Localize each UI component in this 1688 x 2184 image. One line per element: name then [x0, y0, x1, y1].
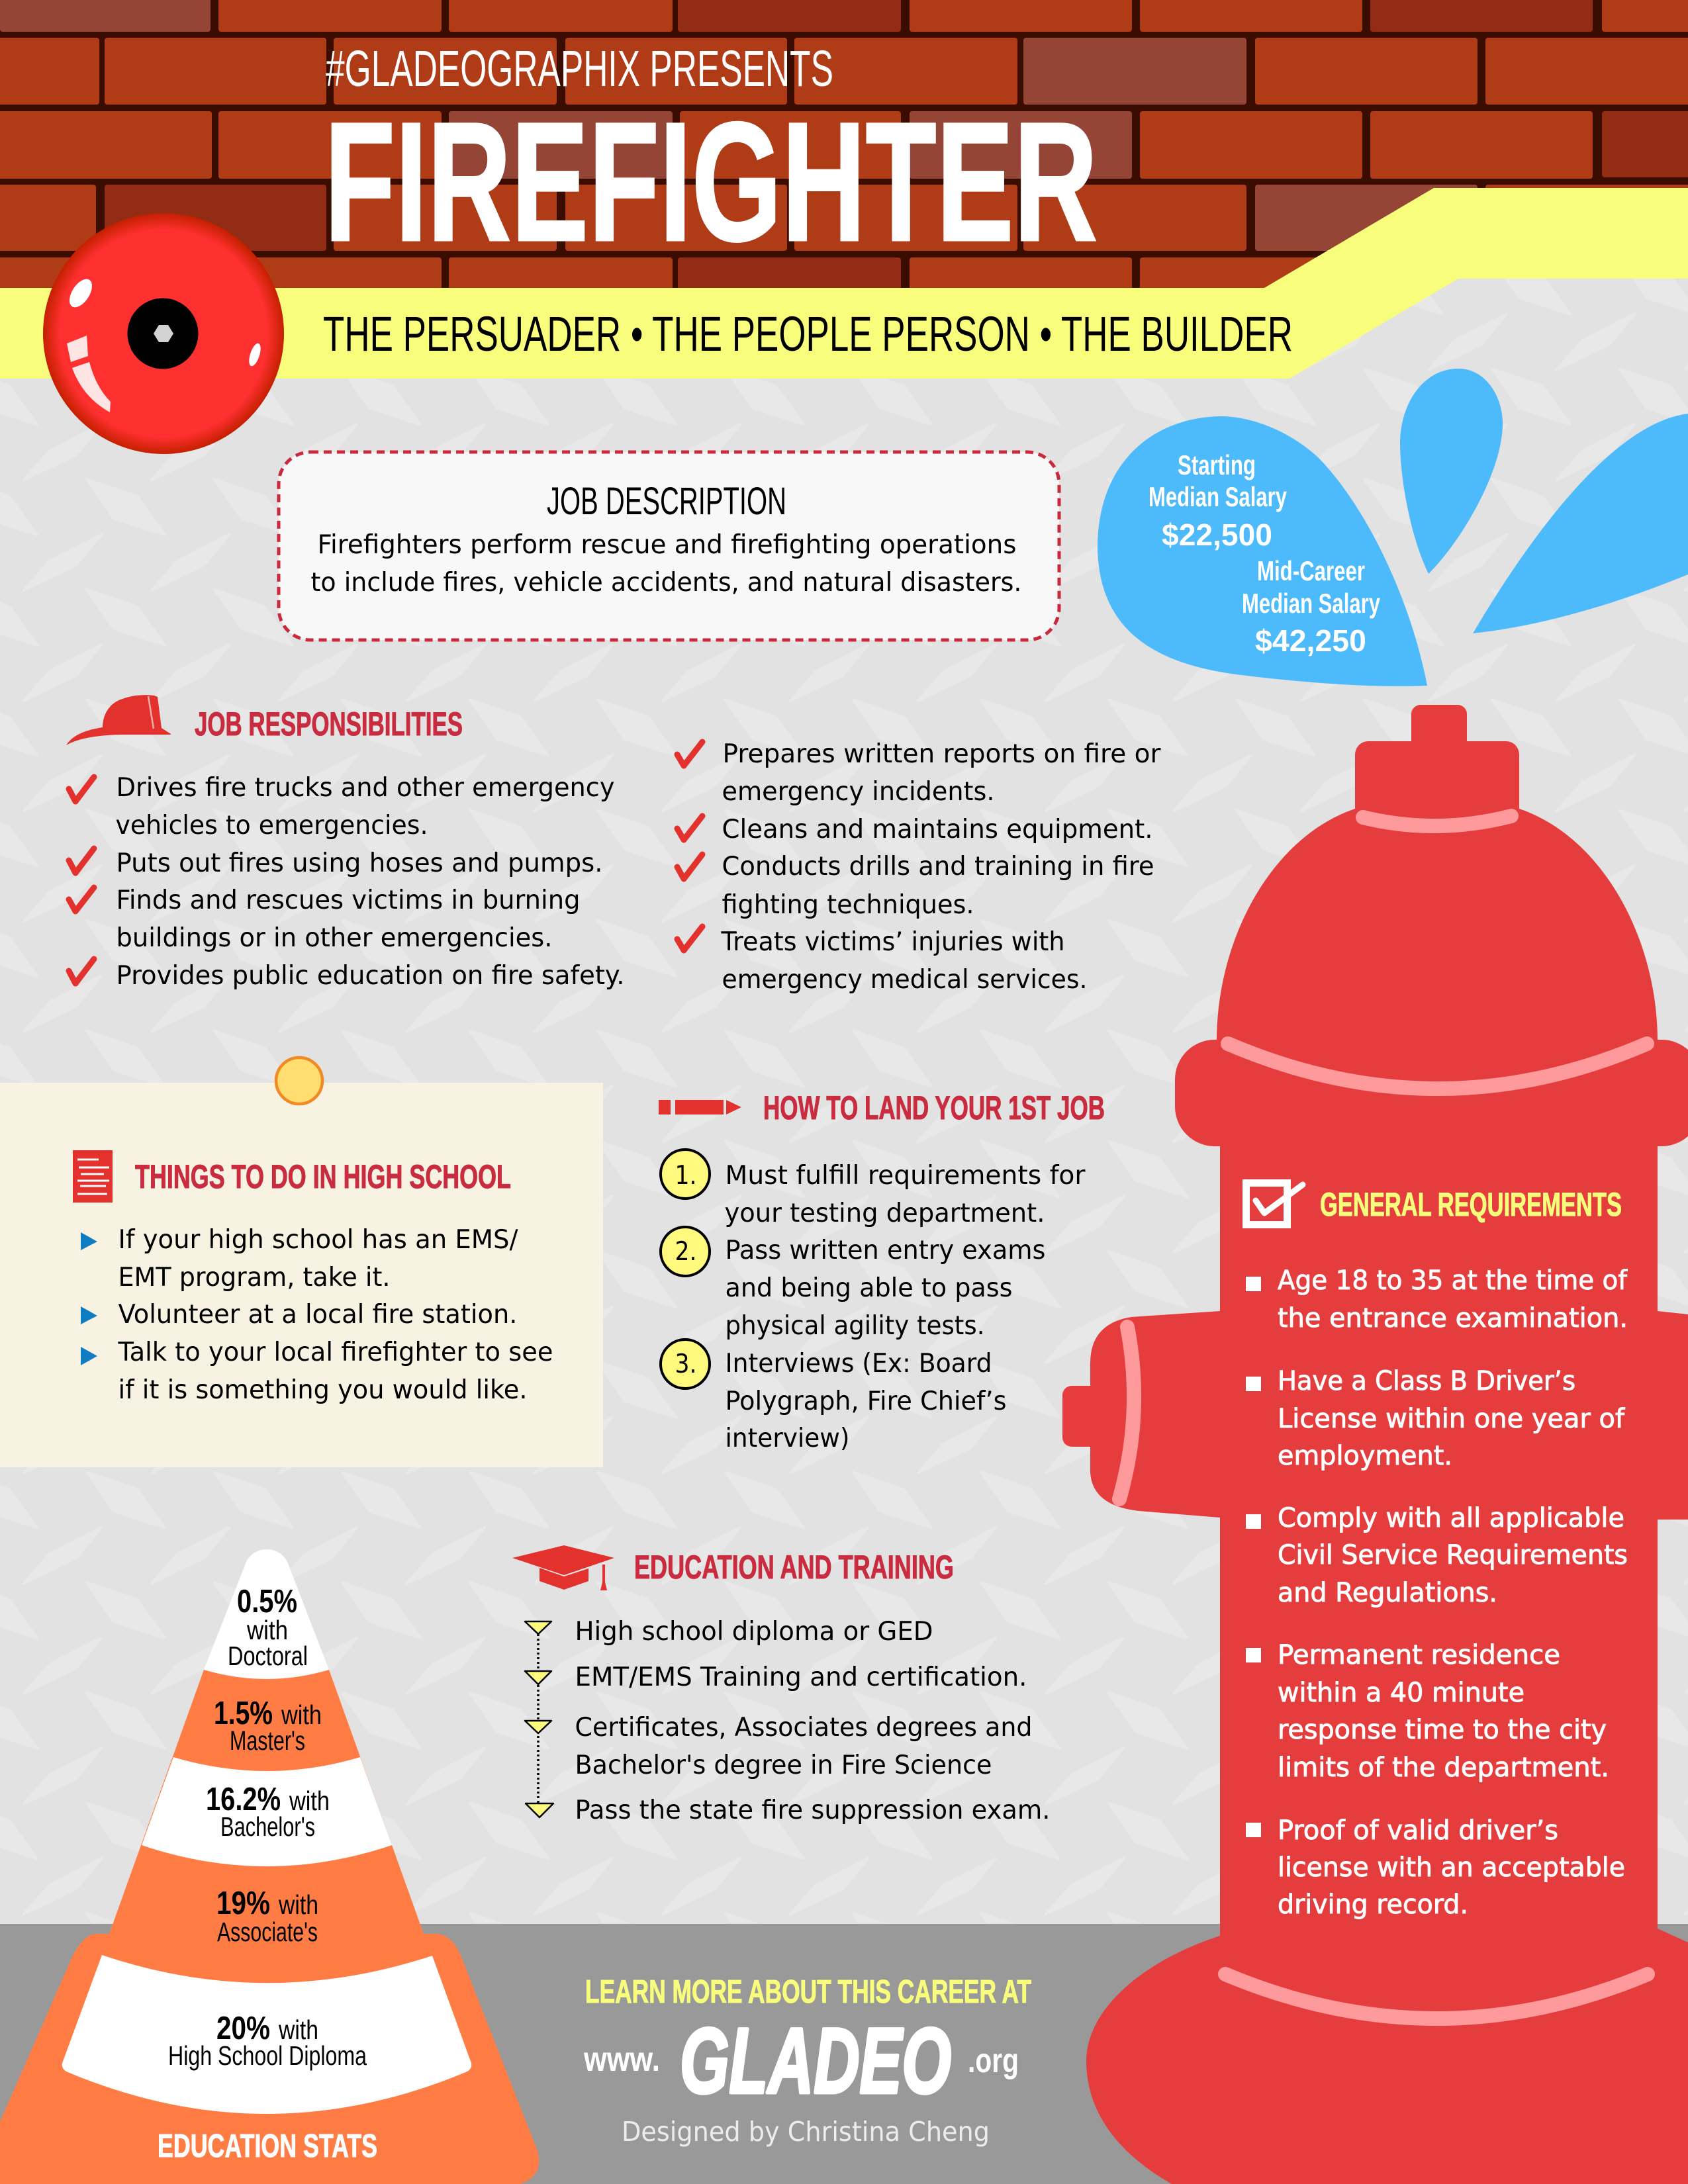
text: education steps: High school diploma or GED	[575, 1617, 933, 1647]
step 2: and being able to pass	[726, 1273, 1013, 1303]
checklist: left: vehicles to emergencies.	[115, 811, 428, 841]
requirement: civil service: Comply with all applicable	[1278, 1503, 1624, 1533]
title: FIREFIGHTER	[324, 87, 1098, 277]
text: job description body: to include fires, vehicle accidents, and natural disasters.	[311, 568, 1022, 598]
list: high school: if it is something you would like.	[118, 1375, 527, 1405]
requirement: residence: within a 40 minute	[1278, 1678, 1524, 1708]
panel: job responsibilities	[66, 695, 1161, 995]
logo: gladeo url: www.	[583, 2040, 660, 2079]
requirement: driving record	[1246, 1815, 1625, 1920]
step 1	[661, 1150, 1086, 1228]
checklist: right: emergency incidents.	[722, 777, 994, 807]
icon: document	[73, 1150, 113, 1203]
stat: doctoral: Doctoral	[228, 1641, 308, 1671]
logo: gladeo url: .org	[968, 2042, 1019, 2080]
step 3: interview)	[726, 1424, 850, 1453]
drop: salary	[1098, 416, 1427, 686]
stat: masters: Master's	[230, 1725, 305, 1756]
checklist: left: Puts out fires using hoses and pumps.	[117, 848, 602, 878]
step 2: physical agility tests.	[726, 1311, 985, 1341]
list: high school: EMT program, take it.	[118, 1263, 391, 1293]
checklist: right	[677, 739, 1161, 995]
requirement: residence: response time to the city	[1278, 1715, 1607, 1745]
stat: bachelors	[206, 1782, 330, 1842]
requirement: age: Age 18 to 35 at the time of	[1278, 1265, 1628, 1296]
stat: doctoral: with	[246, 1615, 288, 1645]
text: learn more: LEARN MORE ABOUT THIS CAREER AT	[585, 1974, 1031, 2010]
stat: bachelors: 16.2%	[206, 1782, 281, 1817]
stat: high school: with	[278, 2015, 318, 2045]
requirement: civil service: and Regulations.	[1278, 1578, 1497, 1608]
text: starting median salary	[1149, 449, 1287, 552]
heading: how to land your 1st job: HOW TO LAND YOUR 1ST JOB	[763, 1089, 1105, 1126]
requirement: civil service: Civil Service Requirements	[1278, 1540, 1628, 1570]
stat: high school: High School Diploma	[168, 2040, 367, 2071]
step 2: 2.	[675, 1237, 696, 1267]
step 2: Pass written entry exams	[726, 1236, 1046, 1265]
icon: checkbox	[1246, 1183, 1303, 1224]
stat: associates: 19%	[216, 1886, 270, 1921]
text: education steps: EMT/EMS Training and certification.	[575, 1662, 1027, 1692]
icon: fire alarm bell	[43, 213, 284, 454]
requirement: license: License within one year of	[1278, 1404, 1625, 1434]
pin	[276, 1058, 322, 1104]
text: job description body	[311, 530, 1022, 598]
stat: doctoral: 0.5%	[237, 1584, 297, 1619]
requirement: driving record: driving record.	[1278, 1889, 1468, 1920]
step 3: Polygraph, Fire Chief’s	[726, 1387, 1006, 1416]
icon: firefighter helmet	[66, 695, 171, 745]
list: high school: If your high school has an EMS/	[118, 1225, 518, 1255]
checklist: left	[69, 773, 625, 991]
requirement: civil service	[1246, 1503, 1628, 1608]
checklist: right: Cleans and maintains equipment.	[722, 815, 1153, 844]
checklist: right: emergency medical services.	[722, 965, 1087, 995]
pre-title: #GLADEOGRAPHIX PRESENTS	[326, 40, 833, 97]
list: high school: Volunteer at a local fire station.	[118, 1300, 518, 1330]
checklist: left: Finds and rescues victims in burning	[117, 886, 580, 915]
icon: pencil arrow	[659, 1100, 741, 1115]
stat: doctoral	[228, 1584, 308, 1671]
text: job description body: Firefighters perform rescue and firefighting operations	[318, 530, 1017, 560]
panel: education and training	[512, 1545, 1050, 1825]
checklist: left: buildings or in other emergencies.	[117, 923, 552, 953]
panel: things to do in high school	[0, 1058, 603, 1467]
list: high school	[81, 1225, 553, 1405]
list: high school: Talk to your local firefighter to see	[118, 1338, 553, 1367]
requirement: license	[1246, 1366, 1625, 1471]
yellow banner	[0, 188, 1688, 379]
heading: education stats: EDUCATION STATS	[158, 2128, 377, 2164]
step 3: 3.	[675, 1349, 696, 1379]
stat: masters: 1.5%	[214, 1696, 273, 1731]
checklist: left: Provides public education on fire safety.	[117, 961, 625, 991]
text: education steps	[575, 1617, 1050, 1825]
requirement: driving record: license with an acceptable	[1278, 1852, 1625, 1883]
footer call to action	[583, 1974, 1031, 2148]
checklist: right: fighting techniques.	[722, 890, 974, 920]
text: starting median salary: $22,500	[1162, 518, 1272, 552]
requirement: residence: Permanent residence	[1278, 1640, 1560, 1670]
text: mid-career median salary	[1242, 555, 1380, 658]
requirement: license: employment.	[1278, 1441, 1452, 1471]
text: starting median salary: Median Salary	[1149, 481, 1287, 512]
step 2	[661, 1227, 1046, 1341]
heading: things to do in high school: THINGS TO DO IN HIGH SCHOOL	[135, 1158, 511, 1195]
requirement: license: Have a Class B Driver’s	[1278, 1366, 1575, 1396]
logo: gladeo url	[583, 2009, 1019, 2113]
stat: associates: Associate's	[217, 1917, 318, 1947]
text: starting median salary: Starting	[1178, 449, 1256, 480]
text: mid-career median salary: Mid-Career	[1257, 555, 1365, 586]
heading: education and training: EDUCATION AND TRAINING	[634, 1549, 954, 1586]
heading: job responsibilities: JOB RESPONSIBILITIES	[195, 705, 463, 743]
drop: right	[1473, 414, 1688, 633]
stat: high school	[168, 2011, 367, 2071]
requirement: residence: limits of the department.	[1278, 1752, 1609, 1783]
stat: associates: with	[278, 1889, 318, 1920]
requirement: residence	[1246, 1640, 1609, 1783]
step 1: your testing department.	[724, 1199, 1045, 1228]
step 3: Interviews (Ex: Board	[726, 1349, 992, 1379]
checklist: right: Prepares written reports on fire or	[723, 739, 1161, 769]
checklist: right: Conducts drills and training in fire	[722, 852, 1154, 882]
icon: graduation cap	[512, 1545, 614, 1590]
text: designer credit: Designed by Christina Cheng	[622, 2116, 990, 2148]
logo: gladeo url: GLADEO	[680, 2009, 951, 2113]
brick wall header	[0, 0, 1688, 297]
footer band	[0, 1924, 1688, 2184]
requirement: age	[1246, 1265, 1628, 1334]
step 1: 1.	[675, 1161, 696, 1191]
text: education steps: Bachelor's degree in Fire Science	[575, 1751, 992, 1780]
text: mid-career median salary: $42,250	[1255, 623, 1366, 658]
stat: masters: with	[281, 1700, 322, 1730]
panel: job description	[279, 452, 1059, 640]
stat: high school: 20%	[216, 2011, 270, 2046]
checklist: right: Treats victims’ injuries with	[721, 927, 1064, 957]
hydrant	[1062, 705, 1688, 2184]
stat: bachelors: Bachelor's	[220, 1811, 315, 1842]
stat: masters	[214, 1696, 322, 1756]
step 3	[661, 1340, 1006, 1453]
water drops: salary	[1098, 369, 1688, 686]
panel: general requirements	[1246, 1183, 1628, 1920]
panel: how to land your first job	[659, 1089, 1105, 1453]
text: mid-career median salary: Median Salary	[1242, 588, 1380, 619]
requirement: age: the entrance examination.	[1278, 1303, 1628, 1334]
heading: job description: JOB DESCRIPTION	[547, 480, 786, 523]
step 1: Must fulfill requirements for	[726, 1161, 1086, 1191]
stat: bachelors: with	[289, 1786, 330, 1816]
stat: associates	[216, 1886, 318, 1947]
checklist: left: Drives fire trucks and other emergency	[117, 773, 614, 803]
drop: middle	[1400, 369, 1503, 574]
chart: education stats cone	[0, 1549, 539, 2184]
timeline	[525, 1621, 553, 1817]
tagline: THE PERSUADER • THE PEOPLE PERSON • THE BUILDER	[323, 306, 1293, 361]
text: education steps: Pass the state fire suppression exam.	[575, 1796, 1050, 1825]
requirement: driving record: Proof of valid driver’s	[1278, 1815, 1558, 1846]
text: education steps: Certificates, Associates degrees and	[575, 1713, 1033, 1743]
